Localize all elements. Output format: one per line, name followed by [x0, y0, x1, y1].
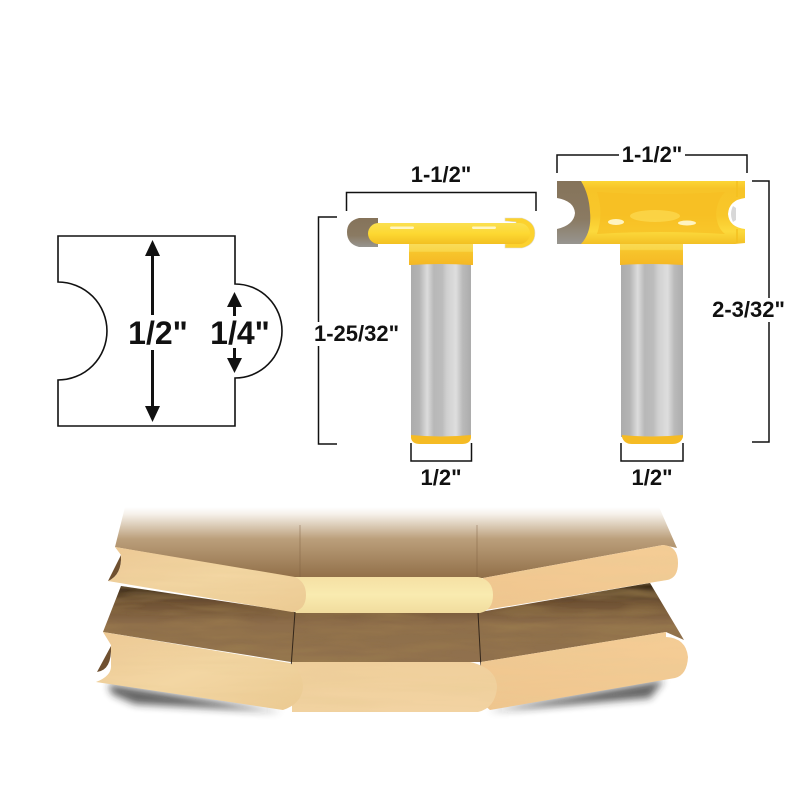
dimension: overall height: 1-25/32": [314, 321, 399, 346]
shank: [411, 262, 471, 437]
groove shading: [597, 192, 725, 234]
dimension: overall height: 2-3/32": [712, 297, 785, 322]
dimension: top width: 1-1/2": [411, 162, 471, 187]
router bit 1: [312, 162, 536, 490]
carbide cutter: [557, 181, 592, 244]
lower right board: [478, 632, 688, 710]
lower left notch: [97, 646, 111, 672]
shadow under left board: [108, 684, 282, 712]
lower centre board: [292, 662, 497, 712]
dimension: shank width: 1/2": [420, 465, 462, 490]
highlights: [390, 226, 496, 229]
highlights: [608, 219, 696, 226]
carbide cutter: [347, 218, 378, 247]
arrow: 1/2 inch height: [145, 240, 160, 422]
router bit 2: [557, 142, 788, 490]
shank tip: [622, 435, 683, 444]
lower left board: [96, 632, 303, 710]
wood panels: [96, 507, 688, 712]
neck: [620, 240, 683, 265]
neck: [409, 243, 473, 265]
dimension: shank width: [411, 443, 472, 490]
arrow: 1/4 inch height: [227, 292, 242, 373]
upper right board: [470, 545, 678, 610]
profile diagram: [58, 236, 282, 426]
upper centre board: [285, 577, 493, 613]
centre highlight: [630, 210, 680, 222]
yellow body: [368, 223, 530, 244]
label: 1/2 inch: 1/2": [128, 315, 188, 351]
bearing: [731, 206, 736, 222]
dimension: shank width: [621, 443, 683, 490]
shank: [621, 262, 683, 437]
upper left board: [108, 547, 306, 612]
dimension: top width: 1-1/2": [622, 142, 682, 167]
dimension: overall height: [312, 217, 402, 444]
upper row joints: [300, 525, 477, 577]
right rim: [736, 181, 738, 243]
lower row joints: [291, 612, 481, 668]
dimension: top width: [557, 142, 747, 173]
dimension: overall height: [708, 181, 788, 442]
yellow body: [581, 181, 745, 244]
profile outline: [58, 236, 282, 426]
dimension: top width: [346, 162, 536, 211]
dimension: shank width: 1/2": [631, 465, 673, 490]
label: 1/4 inch: 1/4": [210, 315, 270, 351]
upper left notch: [108, 555, 121, 581]
shank tip: [411, 435, 471, 444]
shadow under right board: [488, 680, 664, 711]
lower row back faces: [103, 583, 684, 662]
right hook: [505, 218, 535, 248]
upper row back faces: [115, 507, 677, 578]
